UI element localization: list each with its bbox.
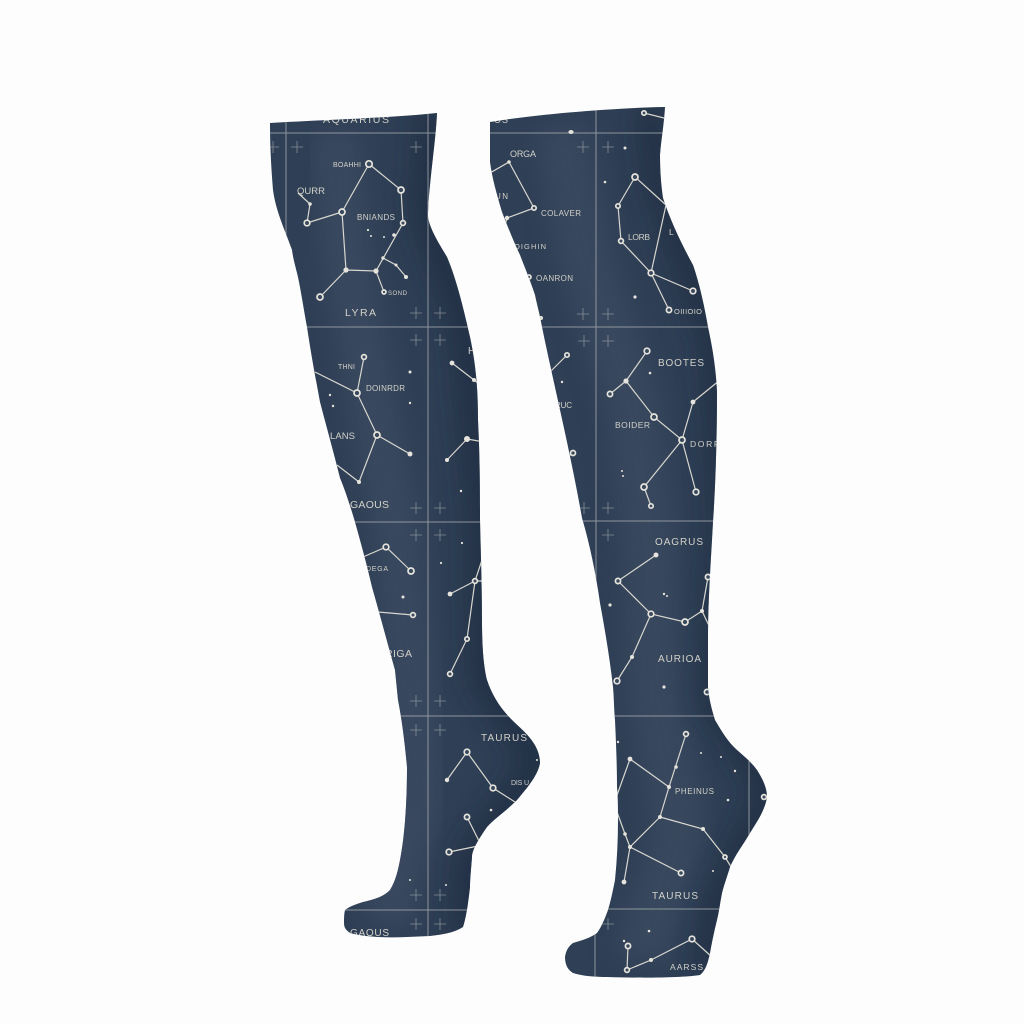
constellation: Lyra: BNIANDS xyxy=(357,213,395,222)
constellation: Orga: UN xyxy=(495,192,508,201)
constellation: Oagrus / Aurioa xyxy=(608,537,712,695)
constellation: Pegasus: GAOUS xyxy=(350,499,389,511)
constellation: Bootes: BOOTES xyxy=(658,358,704,369)
left sock xyxy=(270,113,540,938)
constellation: Bootes: DORR xyxy=(690,439,720,449)
constellation: Lorb xyxy=(604,111,702,316)
label: top fragment: OS xyxy=(494,115,508,125)
constellation: Lyra xyxy=(297,161,408,319)
constellation: Taurus: TAURUS xyxy=(652,891,698,902)
constellation: Orga: OANRON xyxy=(536,274,573,283)
constellation: toe: AARSS xyxy=(670,962,703,972)
constellation: Orga: OIGHIN xyxy=(514,242,546,251)
constellation: middle fragment xyxy=(440,542,482,676)
constellation: Pegasus: DOINRDR xyxy=(366,384,405,393)
constellation: Hercules fragment xyxy=(445,347,479,492)
constellation: Pegasus: THNI xyxy=(338,364,355,371)
constellation: Orga: COLAVER xyxy=(541,209,581,218)
constellation: Auriga: RIGA xyxy=(385,648,412,660)
constellation: Pegasus: LANS xyxy=(330,431,355,442)
constellation: Hercules fragment: H xyxy=(468,346,475,357)
constellation: Taurus: TAURUS xyxy=(481,733,527,744)
constellation: Lorb: LORB xyxy=(628,232,650,242)
constellation: Oagrus / Aurioa: OAGRUS xyxy=(655,537,703,548)
right sock xyxy=(480,95,780,985)
constellation: Taurus xyxy=(616,732,766,902)
constellation: Lorb: L xyxy=(669,227,674,237)
constellation: Lorb: OIIIOIO xyxy=(674,307,702,316)
constellation: left fragment xyxy=(548,353,576,458)
constellation: left fragment: RUC xyxy=(555,401,572,410)
constellation: Pegasus xyxy=(315,355,412,511)
constellation: Taurus xyxy=(409,733,538,886)
constellation: Lyra: QURR xyxy=(297,186,325,197)
constellation: Lyra: SOND xyxy=(388,291,408,297)
constellation: Orga xyxy=(490,130,581,320)
constellation: Auriga xyxy=(363,544,415,660)
constellation: Taurus: DIS U xyxy=(511,780,529,787)
constellation: Bootes xyxy=(607,348,720,508)
constellation: Lyra: BOAHHI xyxy=(333,162,361,169)
constellation: Lyra: LYRA xyxy=(345,307,376,319)
constellation: Bootes: BOIDER xyxy=(615,420,650,430)
constellation: Orga: ORGA xyxy=(510,149,536,159)
constellation: toe xyxy=(623,930,712,972)
label: Aquarius: AQUARIUS xyxy=(323,114,389,126)
constellation: Oagrus / Aurioa: AURIOA xyxy=(658,654,701,665)
constellation: Taurus: PHEINUS xyxy=(675,787,714,796)
constellation: Auriga: DEGA xyxy=(366,566,388,573)
label: Pegasus bottom: GAOUS xyxy=(350,928,389,939)
